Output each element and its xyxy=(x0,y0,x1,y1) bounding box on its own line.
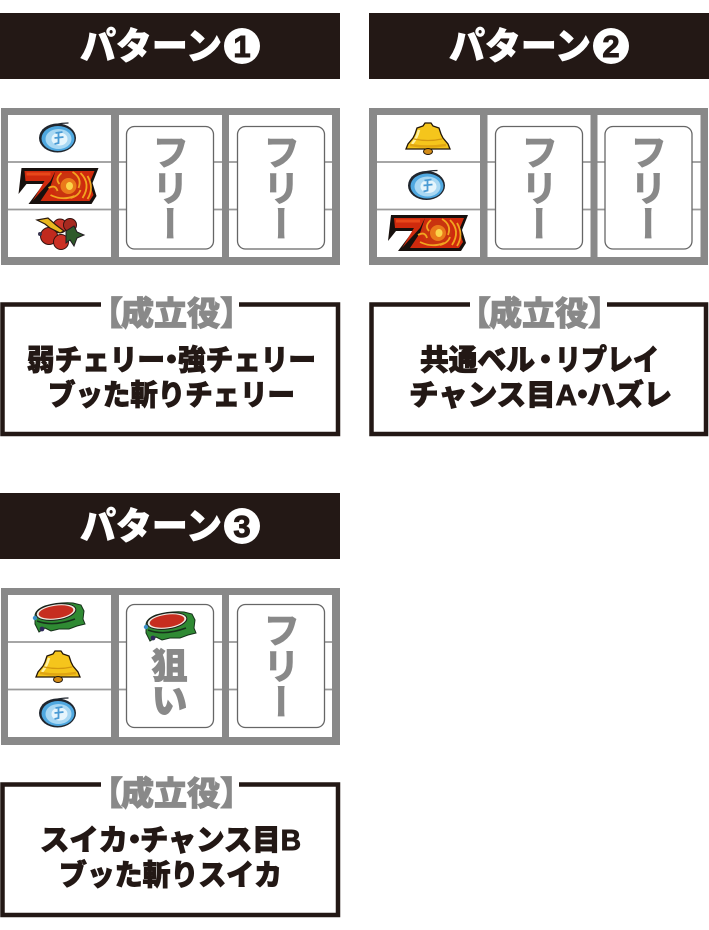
panel: 成立役 パターン2: リプレイ xyxy=(555,344,659,377)
aim reel 2: 狙い xyxy=(146,647,188,717)
panel: 成立役 パターン2: ・ xyxy=(531,345,560,377)
panel: 成立役 パターン3: 成立役 xyxy=(121,775,220,812)
free reel 2: フリー xyxy=(146,133,188,241)
header: パターン1 xyxy=(0,13,340,79)
reel panel: パターン1 xyxy=(1,108,340,265)
panel: 成立役 パターン1: ・ xyxy=(157,345,186,377)
reel panel: パターン3 xyxy=(1,588,340,745)
icon: watermelon xyxy=(33,601,85,632)
icon: リプレイ coin xyxy=(39,123,76,152)
free reel 2 xyxy=(126,126,214,249)
free reel 3: フリー xyxy=(258,133,298,241)
free reel 2 xyxy=(496,126,582,249)
header: パターン2 xyxy=(369,13,709,79)
panel: 成立役 パターン3: スイカ xyxy=(40,825,128,857)
panel: 成立役 パターン1 xyxy=(2,295,338,434)
icon: bell xyxy=(406,123,450,154)
panel: 成立役 パターン1: 【 xyxy=(90,295,123,332)
panel: 成立役 パターン1: ブッた斬りチェリー xyxy=(48,378,295,412)
panel: 成立役 パターン3: ブッた斬りスイカ xyxy=(59,858,282,892)
panel: 成立役 パターン1: 成立役 xyxy=(121,295,220,332)
icon: red seven xyxy=(388,215,468,251)
icon: cherry xyxy=(37,218,84,250)
panel: 成立役 パターン3: 】 xyxy=(220,775,253,812)
panel: 成立役 パターン2 xyxy=(372,295,706,434)
panel: 成立役 パターン3: ・ xyxy=(120,825,149,857)
panel: 成立役 パターン1: 強チェリー xyxy=(178,344,316,377)
header: パターン3: パターン xyxy=(80,506,222,547)
icon: リプレイ coin xyxy=(39,698,76,728)
panel: 成立役 パターン2: 【 xyxy=(458,295,491,332)
header: パターン3: 3 xyxy=(233,509,251,544)
panel: 成立役 パターン1: 】 xyxy=(220,295,253,332)
free reel 3: フリー xyxy=(624,133,666,241)
header: パターン3 xyxy=(0,493,340,559)
header: パターン1: 1 xyxy=(233,29,251,64)
panel: 成立役 パターン1: 弱チェリー xyxy=(27,345,165,377)
icon: bell xyxy=(36,651,80,682)
header: パターン2: パターン xyxy=(449,26,591,67)
free reel 3: フリー xyxy=(258,611,298,719)
panel: 成立役 パターン2: チャンス目A xyxy=(409,380,577,412)
panel: 成立役 パターン2: 共通ベル xyxy=(420,344,535,377)
panel: 成立役 パターン3: チャンス目B xyxy=(140,825,301,857)
panel: 成立役 パターン3: 【 xyxy=(90,775,123,812)
free reel 3 xyxy=(605,126,692,249)
panel: 成立役 パターン3 xyxy=(2,775,338,915)
free reel 2: フリー xyxy=(516,133,556,241)
panel: 成立役 パターン2: ・ xyxy=(568,380,597,412)
free reel 3 xyxy=(238,604,324,728)
icon: watermelon target xyxy=(144,610,196,641)
header: パターン1: パターン xyxy=(80,26,222,67)
panel: 成立役 パターン2: 】 xyxy=(588,295,621,332)
panel: 成立役 パターン2: ハズレ xyxy=(587,378,672,412)
reel panel: パターン2 xyxy=(369,108,708,265)
icon: リプレイ coin xyxy=(408,170,445,200)
panel: 成立役 パターン2: 成立役 xyxy=(489,295,588,332)
icon: red seven xyxy=(18,168,98,204)
free reel 3 xyxy=(238,126,324,249)
aim reel 2 xyxy=(126,604,214,728)
header: パターン2: 2 xyxy=(602,29,620,64)
